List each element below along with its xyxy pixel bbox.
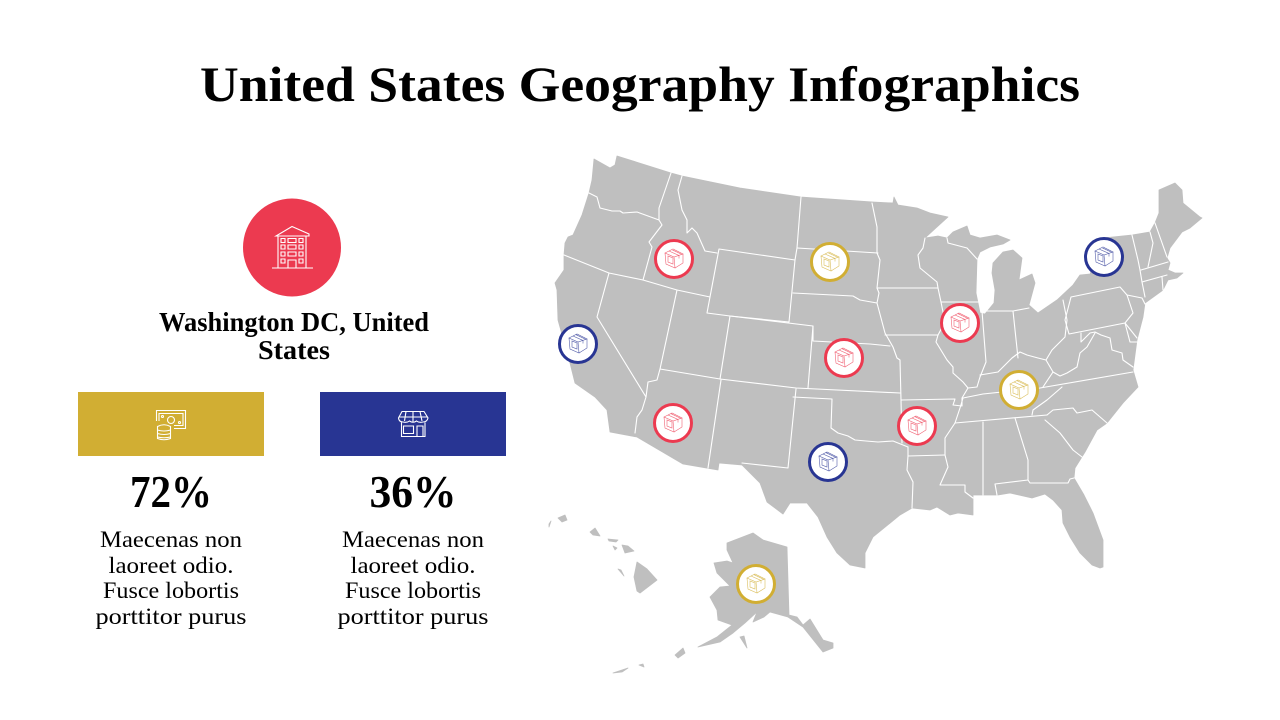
panel: headquarters bbox=[159, 198, 429, 365]
description: porttitor purus bbox=[96, 604, 247, 629]
marker: South Dakota bbox=[812, 244, 848, 280]
description bbox=[338, 527, 489, 629]
value: 36% bbox=[370, 466, 456, 517]
map: United States bbox=[549, 156, 1202, 673]
marker: New York bbox=[1086, 238, 1122, 276]
description: laoreet odio. bbox=[350, 553, 476, 578]
heading: location: States bbox=[258, 335, 330, 365]
panel: stat 36% bbox=[320, 392, 506, 629]
title: United States Geography Infographics bbox=[200, 56, 1080, 112]
marker: Kansas bbox=[826, 340, 862, 376]
value: 72% bbox=[130, 466, 212, 517]
icon: building in red circle bbox=[243, 198, 341, 296]
map: Hawaii bbox=[549, 515, 657, 593]
map: contiguous states bbox=[555, 156, 1202, 568]
heading: location bbox=[159, 307, 429, 365]
description bbox=[96, 527, 247, 629]
map: Alaska bbox=[613, 533, 833, 673]
marker: Idaho bbox=[656, 240, 692, 278]
marker: Alaska bbox=[738, 566, 774, 602]
description: Fusce lobortis bbox=[345, 578, 481, 603]
marker: Kentucky bbox=[1000, 372, 1038, 408]
marker: Arizona bbox=[654, 404, 692, 442]
description: Maecenas non bbox=[100, 527, 243, 552]
panel: stat 72% bbox=[78, 392, 264, 629]
description: laoreet odio. bbox=[108, 553, 234, 578]
marker: California bbox=[560, 326, 596, 362]
description: Maecenas non bbox=[342, 527, 485, 552]
marker: Arkansas bbox=[898, 408, 936, 444]
heading: location: Washington DC, United bbox=[159, 307, 429, 337]
description: porttitor purus bbox=[338, 604, 489, 629]
description: Fusce lobortis bbox=[103, 578, 239, 603]
icon: money on gold banner bbox=[78, 392, 264, 456]
icon: store on blue banner bbox=[320, 392, 506, 456]
marker: Texas bbox=[810, 444, 846, 480]
marker: Illinois bbox=[942, 304, 978, 342]
